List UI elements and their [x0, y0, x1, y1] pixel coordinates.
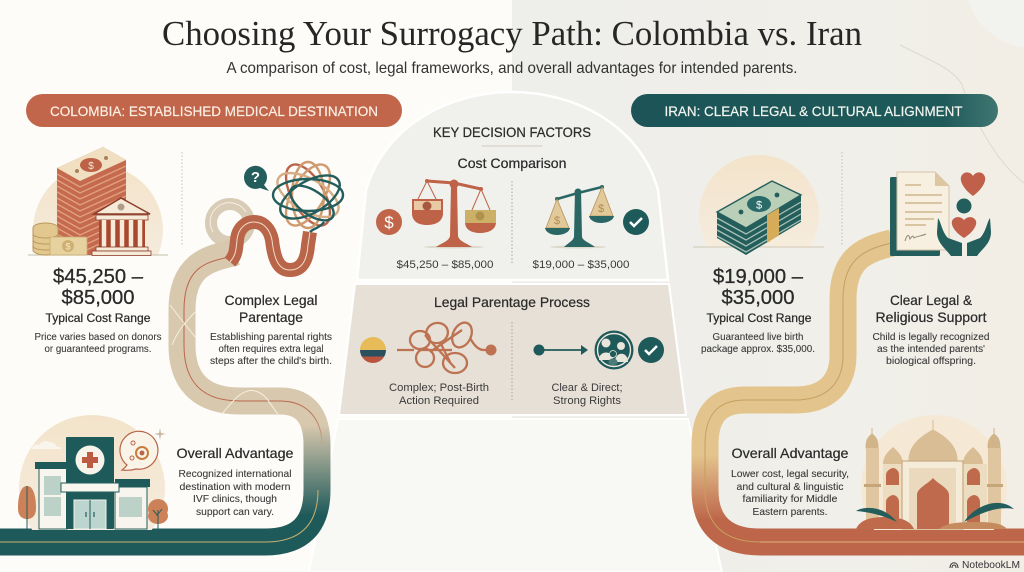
path: Colombia road — [0, 203, 322, 542]
icon: banknote stack: $ — [756, 200, 762, 212]
text: Colombia cost: $85,000 — [62, 286, 134, 309]
text: clear legal and religious support: Clear Legal & — [890, 292, 973, 308]
text: Iran cost: $19,000 – — [713, 265, 804, 288]
text: clear legal and religious support: biological offspring. — [886, 355, 976, 367]
heading pill: Iran: IRAN: CLEAR LEGAL & CULTURAL ALIGNMENT — [664, 103, 963, 119]
text: clear legal and religious support: Child is legally recognized — [872, 331, 990, 343]
panel: lower centre wedge — [309, 419, 722, 572]
label: Iran legal — [552, 382, 622, 407]
icon: hospital — [18, 415, 168, 530]
path: Iran road — [705, 243, 1024, 542]
icon: money stack and bank — [28, 147, 168, 256]
text: Complex legal parentage: Parentage — [239, 309, 303, 325]
heading pill: Colombia: COLOMBIA: ESTABLISHED MEDICAL DESTINATION — [50, 103, 378, 119]
label: Iran legal: Clear & Direct; — [552, 382, 622, 394]
heading pill: Iran — [631, 94, 998, 127]
text: clear legal and religious support — [872, 292, 990, 367]
icon: question bubble: ? — [251, 169, 260, 186]
icon: money stack and bank: $ — [65, 242, 71, 252]
text: Complex legal parentage: steps after the child's birth. — [210, 355, 332, 367]
heading: key decision factors: KEY DECISION FACTORS — [433, 124, 591, 140]
icon: check badge legal — [638, 337, 664, 363]
text: Complex legal parentage — [210, 292, 332, 367]
text: Colombia overall advantage — [176, 445, 294, 518]
text: Colombia overall advantage: IVF clinics, though — [193, 493, 277, 505]
divider dots legal — [511, 322, 513, 400]
divider dots right — [841, 152, 843, 245]
text: Colombia overall advantage: support can vary. — [196, 506, 274, 518]
text: Iran overall advantage: Lower cost, legal security, — [731, 468, 849, 480]
panel: legal parentage band — [339, 284, 686, 415]
icon: Iran scale: $ — [598, 203, 604, 215]
icon: Iran scale: $ — [554, 215, 560, 227]
text: Iran cost: Guaranteed live birth — [712, 331, 804, 343]
divider dots cost — [511, 181, 513, 263]
text: Colombia cost: Price varies based on donors — [34, 331, 162, 343]
label: Colombia cost: $45,250 – $85,000 — [396, 259, 494, 271]
brand: NotebookLM: NotebookLM — [962, 559, 1020, 571]
text: Complex legal parentage: Complex Legal — [224, 292, 318, 308]
text: Colombia overall advantage: Overall Advantage — [176, 445, 294, 461]
label: Colombia legal — [389, 382, 489, 407]
icon: Colombia scale — [412, 179, 496, 248]
icon: dollar badge: $ — [384, 213, 394, 232]
text: Iran overall advantage: and cultural & linguistic — [736, 481, 844, 493]
icon: banknote stack — [693, 155, 824, 255]
icon: Colombia flag — [360, 337, 386, 363]
icon: tangled knot — [271, 158, 347, 232]
text: clear legal and religious support: Religious Support — [876, 309, 987, 325]
divider dots left — [181, 152, 183, 245]
text: Colombia cost: $45,250 – — [53, 265, 144, 288]
text: Colombia overall advantage: Recognized international — [178, 468, 292, 480]
icon: Iran scale — [545, 185, 614, 248]
label: Iran legal: Strong Rights — [553, 395, 621, 407]
text: Complex legal parentage: Establishing parental rights — [210, 331, 332, 343]
text: Iran cost: $35,000 — [722, 286, 794, 309]
icon: mosque — [856, 415, 1014, 530]
title: Choosing Your Surrogacy Path: Colombia vs. Iran — [162, 14, 862, 53]
icon: teal check badge — [623, 209, 649, 235]
text: Iran overall advantage: Eastern parents. — [752, 506, 828, 518]
text: Iran overall advantage: Overall Advantage — [732, 445, 849, 461]
text: Iran overall advantage — [731, 445, 849, 518]
icon: dollar badge — [376, 209, 402, 235]
text: Colombia overall advantage: destination with modern — [180, 481, 291, 493]
icon: question bubble — [244, 166, 269, 191]
text: Iran cost: Typical Cost Range — [706, 311, 812, 325]
label: Iran cost: $19,000 – $35,000 — [532, 259, 630, 271]
text: clear legal and religious support: as the intended parents' — [877, 343, 985, 355]
text: Iran overall advantage: familiarity for Middle — [742, 493, 838, 505]
heading: legal parentage process: Legal Parentage Process — [434, 294, 590, 310]
icon: tangled process line — [397, 319, 496, 373]
text: Colombia cost: or guaranteed programs. — [44, 343, 152, 355]
label: Colombia legal: Action Required — [399, 395, 479, 407]
text: Iran cost: package approx. $35,000. — [701, 343, 815, 355]
text: Colombia cost: Typical Cost Range — [46, 311, 151, 325]
icon: money stack and bank: $ — [88, 161, 94, 172]
text: Complex legal parentage: often requires extra legal — [218, 343, 324, 355]
icon: document with heart and hands — [890, 172, 991, 256]
label: Colombia legal: Complex; Post-Birth — [389, 382, 489, 394]
text: Iran cost — [701, 265, 815, 355]
text: Colombia cost — [34, 265, 162, 355]
heading: cost comparison: Cost Comparison — [458, 155, 566, 171]
heading pill: Colombia — [26, 94, 402, 127]
icon: direct arrow to family — [534, 330, 634, 370]
subtitle: A comparison of cost, legal frameworks, and overall advantages for intended parents. — [226, 60, 798, 77]
panel: key decision factors arch — [357, 92, 668, 280]
icon: speech bubble with fertility symbol — [120, 428, 166, 470]
